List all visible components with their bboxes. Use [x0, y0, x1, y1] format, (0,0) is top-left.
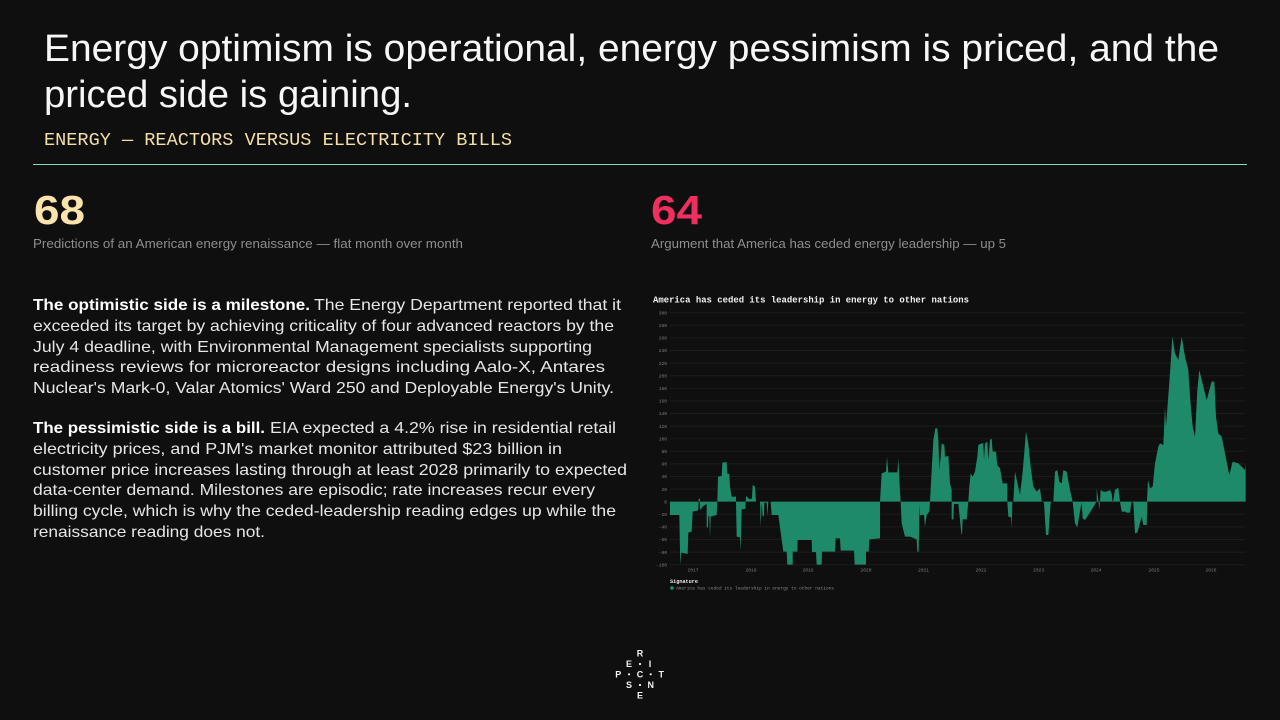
stat: ceded leadership: 64 — [651, 187, 702, 233]
logo: letter cross: S — [626, 680, 632, 690]
legend: Signature — [670, 579, 698, 585]
stat: renaissance predictions: 68 — [34, 187, 85, 233]
y axis labels: 0 — [664, 499, 667, 505]
x axis labels: 2019 — [802, 568, 814, 574]
title — [44, 28, 1219, 116]
text block: pessimistic side: electricity prices, and PJM's market monitor attributed $23 billion in — [33, 441, 562, 458]
stat: renaissance predictions: Predictions of an American energy renaissance — flat month over month — [33, 237, 463, 251]
x axis labels: 2023 — [1033, 568, 1044, 574]
y axis labels: 200 — [659, 373, 667, 379]
logo: letter cross — [615, 648, 665, 700]
title: priced side is gaining. — [44, 74, 412, 116]
stat: ceded leadership: Argument that America has ceded energy leadership — up 5 — [651, 237, 1006, 251]
y axis labels: 300 — [659, 310, 667, 316]
x axis labels: 2022 — [975, 568, 987, 574]
y axis labels: 80 — [661, 449, 667, 455]
text block: pessimistic side: customer price increases lasting through at least 2028 primarily to expected — [33, 462, 627, 479]
stat: ceded leadership — [651, 187, 1006, 251]
text block: pessimistic side — [33, 420, 627, 541]
x axis labels: 2024 — [1090, 568, 1102, 574]
x axis labels: 2018 — [745, 568, 757, 574]
text block: optimistic side: exceeded its target by achieving criticality of four advanced reactors by the — [33, 318, 614, 335]
logo: letter cross: C — [637, 670, 644, 680]
y axis labels: 180 — [659, 386, 667, 392]
y axis labels: -100 — [656, 562, 667, 568]
logo: letter cross: R — [637, 648, 644, 658]
y axis labels: 160 — [659, 399, 667, 405]
y axis labels: 60 — [661, 462, 667, 468]
text block: pessimistic side: data-center demand. Milestones are episodic; rate increases recur every — [33, 482, 595, 499]
y axis labels: 40 — [661, 474, 667, 480]
y axis labels: 120 — [659, 424, 667, 430]
x axis labels: 2017 — [687, 568, 699, 574]
text block: optimistic side — [33, 297, 622, 397]
text block: optimistic side: Nuclear's Mark-0, Valar Atomics' Ward 250 and Deployable Energy's Unity. — [33, 380, 614, 397]
y axis labels: -80 — [659, 550, 667, 556]
y axis labels: -60 — [659, 537, 667, 543]
logo: letter cross: N — [647, 680, 654, 690]
y axis labels: 240 — [659, 348, 667, 354]
chart title: America has ceded its leadership in energy to other nations — [653, 296, 969, 306]
logo: letter cross: P — [615, 670, 621, 680]
y axis labels: 140 — [659, 411, 667, 417]
y axis labels: 280 — [659, 323, 667, 329]
text block: pessimistic side: renaissance reading does not. — [33, 524, 265, 541]
y axis labels: 20 — [661, 487, 667, 493]
text block: pessimistic side: billing cycle, which is why the ceded-leadership reading edges up while the — [33, 503, 616, 520]
x axis labels: 2025 — [1148, 568, 1160, 574]
text block: pessimistic side: EIA expected a 4.2% rise in residential retail — [270, 420, 616, 437]
subtitle: ENERGY — REACTORS VERSUS ELECTRICITY BILLS — [44, 130, 512, 151]
chart: ceded leadership signature area chart — [653, 296, 1246, 592]
y axis labels: 100 — [659, 436, 667, 442]
y axis labels: 220 — [659, 361, 667, 367]
logo: letter cross: E — [626, 659, 632, 669]
text block: pessimistic side: The pessimistic side is a bill. — [33, 420, 265, 437]
y axis labels: -40 — [659, 525, 667, 531]
text block: optimistic side: The optimistic side is a milestone. — [33, 297, 310, 314]
stat: renaissance predictions — [33, 187, 463, 251]
text block: optimistic side: The Energy Department reported that it — [314, 297, 622, 314]
text block: optimistic side: July 4 deadline, with Environmental Management specialists supporting — [33, 339, 592, 356]
logo: letter cross: T — [659, 670, 665, 680]
x axis labels: 2020 — [860, 568, 872, 574]
logo: letter cross: E — [637, 690, 643, 700]
y axis labels: 260 — [659, 336, 667, 342]
text block: optimistic side: readiness reviews for microreactor designs including Aalo-X, Antares — [33, 359, 605, 376]
y axis labels: -20 — [659, 512, 667, 518]
legend — [670, 579, 834, 592]
legend: America has ceded its leadership in energy to other nations — [676, 586, 834, 592]
x axis labels: 2026 — [1205, 568, 1217, 574]
logo: letter cross: I — [649, 659, 651, 669]
x axis labels: 2021 — [918, 568, 929, 574]
x axis labels — [687, 568, 1217, 574]
title: Energy optimism is operational, energy pessimism is priced, and the — [44, 28, 1219, 70]
area series — [670, 337, 1246, 565]
y axis labels — [656, 310, 667, 568]
